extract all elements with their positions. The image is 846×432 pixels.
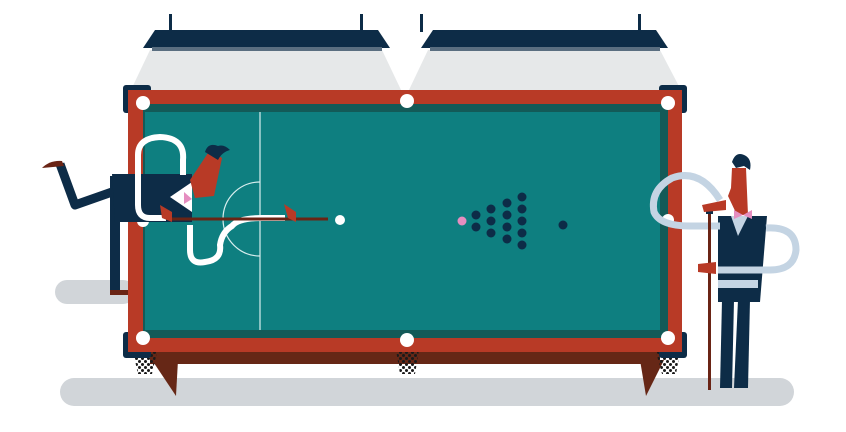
- cushion: [143, 104, 668, 338]
- left player: [42, 137, 328, 295]
- rails: [128, 90, 682, 352]
- lamp left: [130, 14, 402, 92]
- corner brackets: [123, 85, 687, 358]
- pockets: [136, 94, 675, 347]
- balls: [335, 192, 568, 250]
- legs: [60, 164, 112, 205]
- vest: [718, 216, 767, 302]
- pocket nets: [133, 350, 680, 374]
- arm loop: [138, 137, 183, 218]
- torso: [112, 174, 192, 222]
- legs and skirt: [150, 350, 660, 364]
- felt: [145, 112, 660, 330]
- legs: [720, 300, 734, 388]
- hands: [702, 200, 726, 212]
- right player: [653, 154, 796, 390]
- cue stick: [708, 210, 711, 390]
- table: [123, 85, 687, 396]
- baulk line and D: [259, 112, 261, 330]
- floor shadows: [55, 280, 794, 406]
- lamp right: [408, 14, 682, 92]
- arms: [653, 176, 720, 226]
- head: [190, 150, 222, 198]
- hands: [160, 205, 172, 222]
- cue: [172, 218, 328, 220]
- head: [728, 168, 748, 215]
